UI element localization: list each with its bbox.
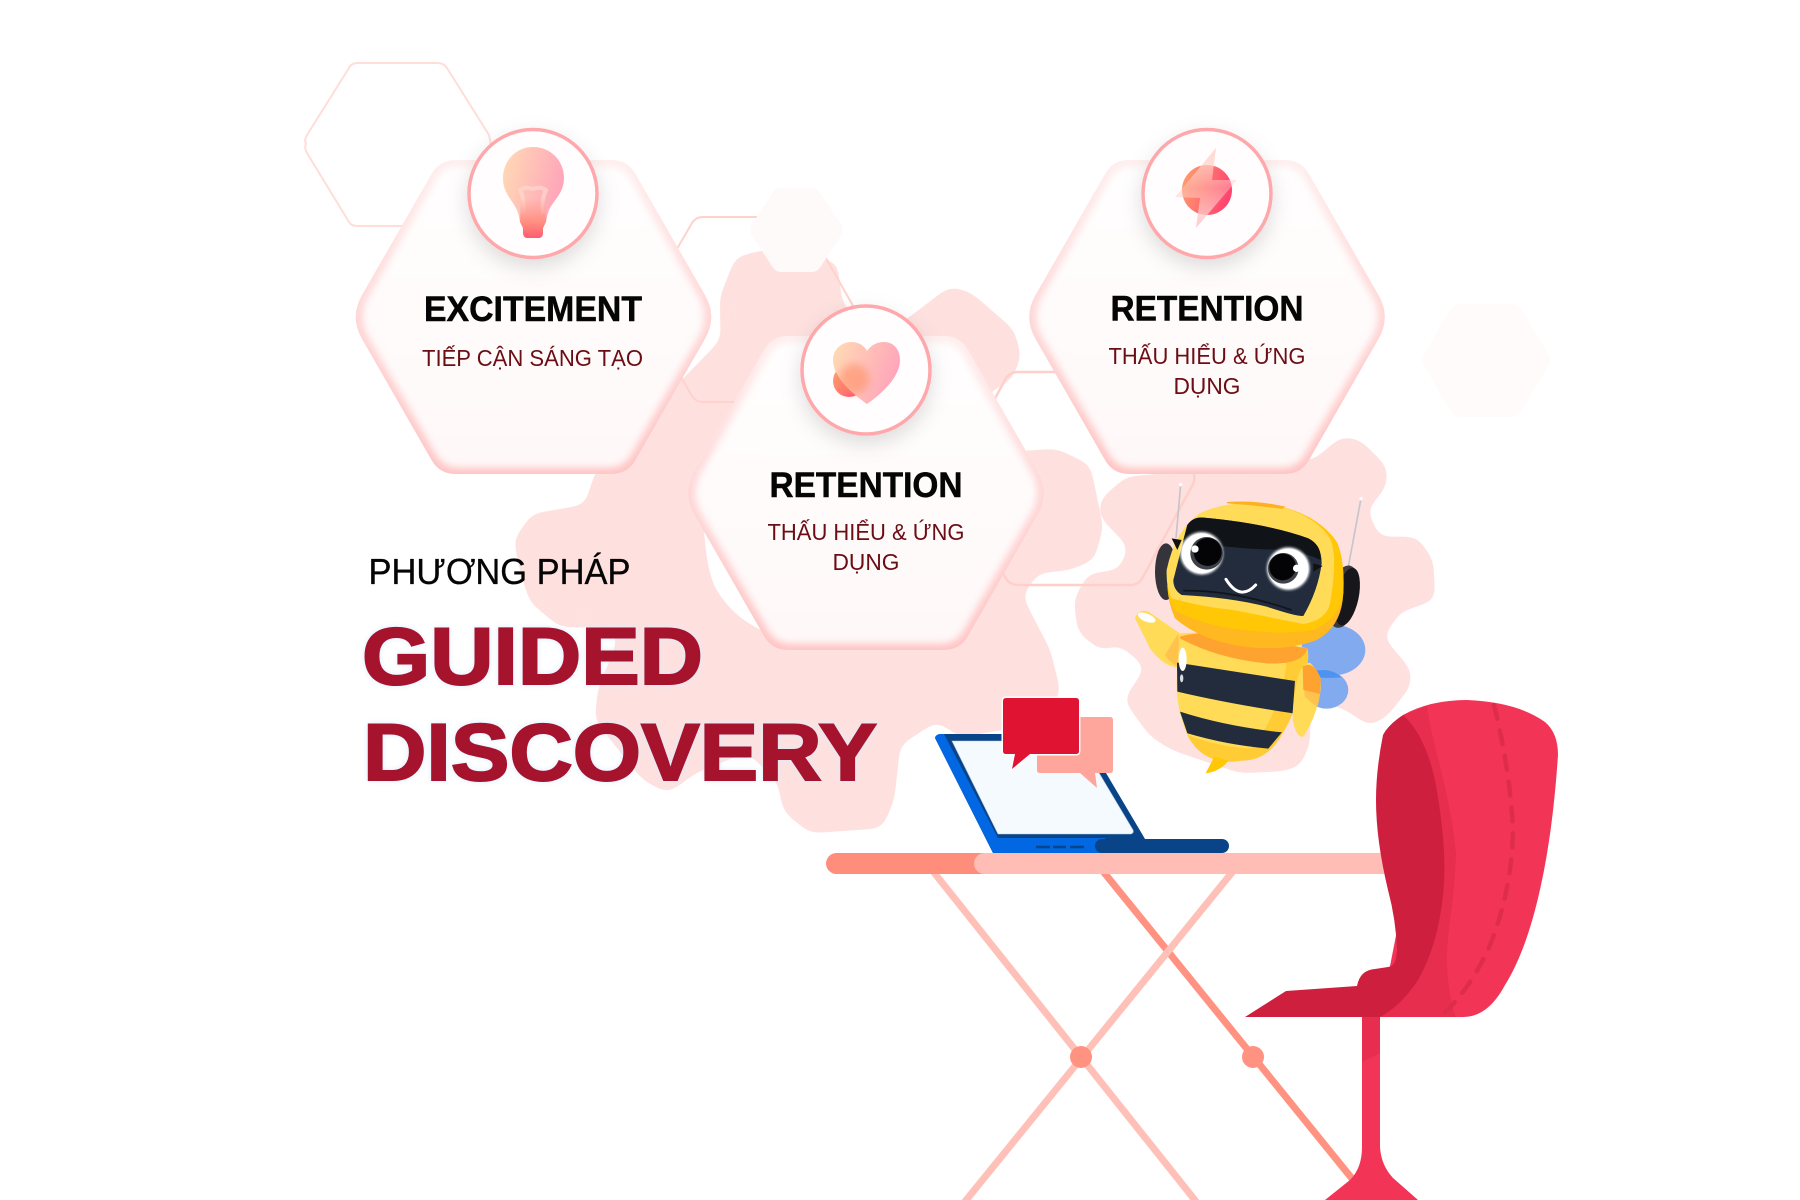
laptop base bar [1095, 839, 1229, 853]
background gear: near the bee [1074, 437, 1435, 773]
table [826, 853, 1394, 1200]
bee stinger [1206, 757, 1228, 773]
title: guided discovery [362, 612, 877, 798]
robot bee [1135, 483, 1365, 773]
text: retention center subtitle [768, 518, 964, 575]
outline hexagon: top left [305, 63, 490, 226]
bee wings [1301, 625, 1365, 709]
table top [826, 853, 1026, 874]
chair [1245, 700, 1558, 1200]
bee mouth shading [1183, 591, 1292, 610]
title: guided discovery: GUIDED [362, 612, 703, 702]
title: guided discovery: DISCOVERY [363, 708, 877, 798]
heading: retention right: RETENTION [1110, 290, 1304, 328]
bubble: salmon [1037, 717, 1113, 788]
text: excitement subtitle: TIẾP CẬN SÁNG TẠO [422, 344, 643, 371]
laptop [935, 734, 1229, 853]
background gear: large [514, 250, 1103, 833]
faint filled hexagon: small top [750, 188, 842, 272]
chair back [1380, 700, 1558, 1017]
panel: retention hexagon right [1029, 160, 1385, 474]
bee head [1167, 503, 1344, 648]
bee left arm [1135, 611, 1180, 667]
text: retention right subtitle [1108, 342, 1306, 399]
panel: retention hexagon center [688, 336, 1044, 650]
text: retention right subtitle: DỤNG [1174, 373, 1240, 399]
bee antennas [1176, 485, 1361, 567]
chair stem and base [1325, 1017, 1418, 1200]
chat bubbles [1003, 698, 1113, 788]
bee eyes [1172, 532, 1323, 590]
background gear hole [703, 331, 1020, 645]
outline hexagon: center [644, 217, 854, 402]
chair stitching [1442, 705, 1513, 1015]
faint filled hexagon: right [1422, 304, 1550, 417]
text: retention right subtitle: THẤU HIỂU & ỨNG [1108, 342, 1306, 369]
text: retention center subtitle: DỤNG [832, 549, 900, 575]
table legs [932, 870, 1358, 1200]
bee right arm [1293, 663, 1321, 737]
bee body [1177, 633, 1308, 762]
title: phuong phap: PHƯƠNG PHÁP [368, 551, 630, 592]
icon: heart badge [802, 306, 930, 434]
bubble: red [1003, 698, 1079, 769]
bee visor [1173, 518, 1322, 616]
bee smile [1226, 579, 1256, 592]
panel: excitement hexagon [356, 160, 711, 474]
heading: retention center: RETENTION [770, 466, 962, 505]
chair seat and inner shell [1245, 715, 1444, 1017]
icon: lightning badge [1143, 130, 1271, 258]
outline hexagon: lower right [954, 372, 1194, 585]
bee headphones [1155, 543, 1365, 631]
text: retention center subtitle: THẤU HIỂU & ỨNG [768, 518, 964, 545]
bee stripes [1177, 663, 1295, 749]
table pivots [1070, 1046, 1264, 1068]
heading: excitement: EXCITEMENT [424, 290, 642, 329]
icon: lightbulb badge [469, 130, 597, 258]
